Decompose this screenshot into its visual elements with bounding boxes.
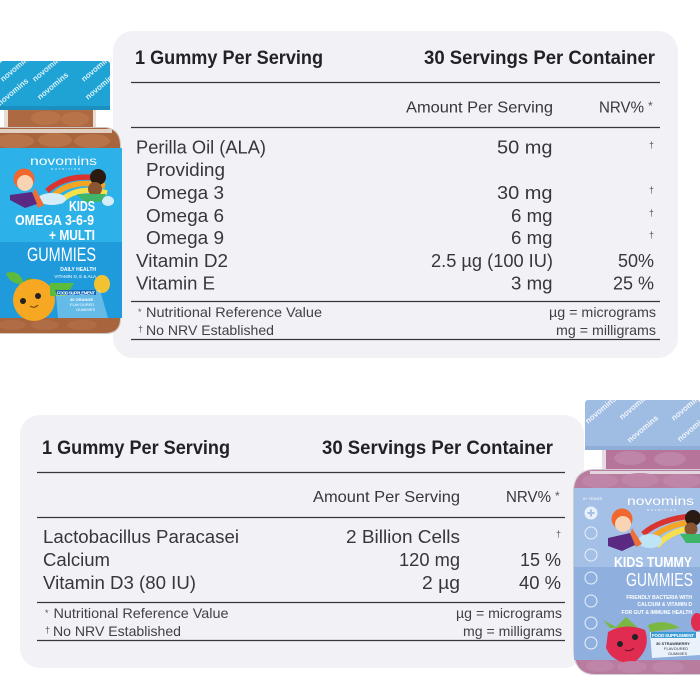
label: FOR GUT & IMMUNE HEALTH (622, 610, 692, 616)
column header: NRV: NRV% (599, 100, 644, 116)
cap: novomins (36, 70, 71, 102)
label: OMEGA 3-6-9 (15, 212, 94, 229)
label: DAILY HEALTH (60, 267, 96, 273)
food supplement tag (55, 290, 96, 312)
nutrient rows: † (556, 529, 561, 539)
nutrient rows: Vitamin E (136, 274, 215, 294)
nutrient rows: 2 µg (422, 573, 460, 593)
footnotes: No NRV Established (146, 322, 274, 338)
cloud (38, 193, 66, 205)
label: FRIENDLY BACTERIA WITH (626, 595, 692, 601)
cap: novomins (31, 52, 66, 84)
cap: novomins (84, 70, 119, 102)
food supplement tag: 30 STRAWBERRY (656, 641, 690, 646)
panel: kids tummy supplement facts (20, 415, 584, 668)
girl (14, 168, 34, 190)
food supplement tag: FOOD SUPPLEMENT (57, 290, 95, 296)
footnotes (45, 605, 562, 639)
label (574, 488, 700, 673)
column header: amount per serving: Amount Per Serving (406, 100, 553, 116)
nutrient rows (136, 138, 654, 294)
cap (585, 400, 700, 450)
nutrient rows: 120 mg (399, 550, 460, 570)
nutrient rows: Omega 3 (146, 183, 224, 203)
footnotes: † (138, 324, 143, 334)
cap: novomins (618, 390, 653, 422)
nutrient rows: † (649, 208, 654, 218)
footnotes: No NRV Established (53, 623, 181, 639)
nutrient rows: 50% (618, 251, 654, 271)
product: kids tummy gummies bottle (573, 390, 700, 675)
footnotes: mg = milligrams (556, 322, 656, 338)
panel: omega 3-6-9 supplement facts (113, 31, 678, 358)
footnotes (138, 304, 656, 338)
nutrient rows: 6 mg (511, 228, 552, 248)
label: novomins (30, 154, 97, 168)
side icons (585, 507, 597, 649)
label: VITAMIN D, E & ALA (54, 274, 96, 279)
bottom gummies (0, 320, 97, 330)
column header: NRV: NRV% (506, 489, 551, 506)
nutrient rows: Calcium (43, 550, 110, 570)
column header: NRV: * (555, 489, 560, 503)
boy (685, 510, 700, 526)
nutrient rows: 15 % (520, 550, 561, 570)
nutrient rows: Omega 6 (146, 206, 224, 226)
nutrient rows: Providing (146, 160, 225, 180)
nutrient rows: 50 mg (497, 138, 552, 158)
footnotes: Nutritional Reference Value (146, 304, 322, 320)
nutrient rows: 40 % (519, 573, 561, 593)
column header: amount per serving: Amount Per Serving (313, 489, 460, 506)
orange mascot (6, 272, 24, 284)
nutrient rows: 30 mg (497, 183, 552, 203)
cap: novomins (626, 413, 661, 445)
heading: servings per container: 30 Servings Per Container (424, 48, 656, 69)
label (0, 148, 122, 330)
bottom gummies (586, 660, 684, 673)
column header: NRV: * (648, 99, 653, 113)
cloud (638, 534, 662, 548)
heading: serving size: 1 Gummy Per Serving (42, 438, 230, 459)
food supplement tag (651, 632, 696, 656)
label: 6+ YEARS (583, 496, 602, 501)
boy (90, 169, 106, 185)
footnotes: * (45, 608, 49, 618)
food supplement tag: 30 ORANGE (70, 297, 93, 302)
label: CALCIUM & VITAMIN D (637, 602, 692, 608)
footnotes: mg = milligrams (463, 623, 562, 639)
label: KIDS (69, 198, 95, 215)
label: novomins (627, 494, 694, 508)
nutrient rows: 3 mg (511, 274, 552, 294)
nutrient rows: † (649, 140, 654, 150)
nutrient rows: Vitamin D2 (136, 251, 228, 271)
nutrient rows: 2.5 µg (100 IU) (431, 251, 553, 271)
food supplement tag: GUMMIES (668, 651, 687, 656)
food supplement tag: FOOD SUPPLEMENT (652, 633, 694, 638)
footnotes: µg = micrograms (549, 304, 656, 320)
nutrient rows: Perilla Oil (ALA) (136, 138, 266, 158)
footnotes: µg = micrograms (456, 605, 562, 621)
footnotes: * (138, 307, 142, 317)
nutrient rows: † (649, 185, 654, 195)
footnotes: † (45, 625, 50, 635)
nutrient rows: 6 mg (511, 206, 552, 226)
nutrient rows: 2 Billion Cells (346, 527, 460, 547)
girl (612, 508, 632, 530)
cap: novomins (584, 394, 619, 426)
nutrient rows: 25 % (613, 274, 654, 294)
footnotes: Nutritional Reference Value (54, 605, 229, 621)
heading: servings per container: 30 Servings Per Container (322, 438, 554, 459)
heading: serving size: 1 Gummy Per Serving (135, 48, 323, 69)
nutrient rows: Omega 9 (146, 228, 224, 248)
label: + MULTI (49, 227, 95, 244)
food supplement tag: GUMMIES (76, 307, 95, 312)
label: GUMMIES (27, 245, 96, 266)
nutrient rows: Lactobacillus Paracasei (43, 527, 239, 547)
nutrient rows (43, 527, 561, 593)
food supplement tag: FLAVOURED (664, 646, 688, 651)
label: NUTRITION (647, 508, 676, 512)
cap (0, 61, 110, 110)
label: NUTRITION (51, 167, 80, 171)
rainbow (47, 177, 107, 202)
product: omega gummies bottle (0, 52, 122, 334)
rainbow (643, 516, 692, 546)
food supplement tag: FLAVOURED (70, 302, 94, 307)
cap: novomins (80, 52, 115, 84)
strawberry mascot (603, 617, 638, 628)
nutrient rows: Vitamin D3 (80 IU) (43, 573, 196, 593)
nutrient rows: † (649, 230, 654, 240)
